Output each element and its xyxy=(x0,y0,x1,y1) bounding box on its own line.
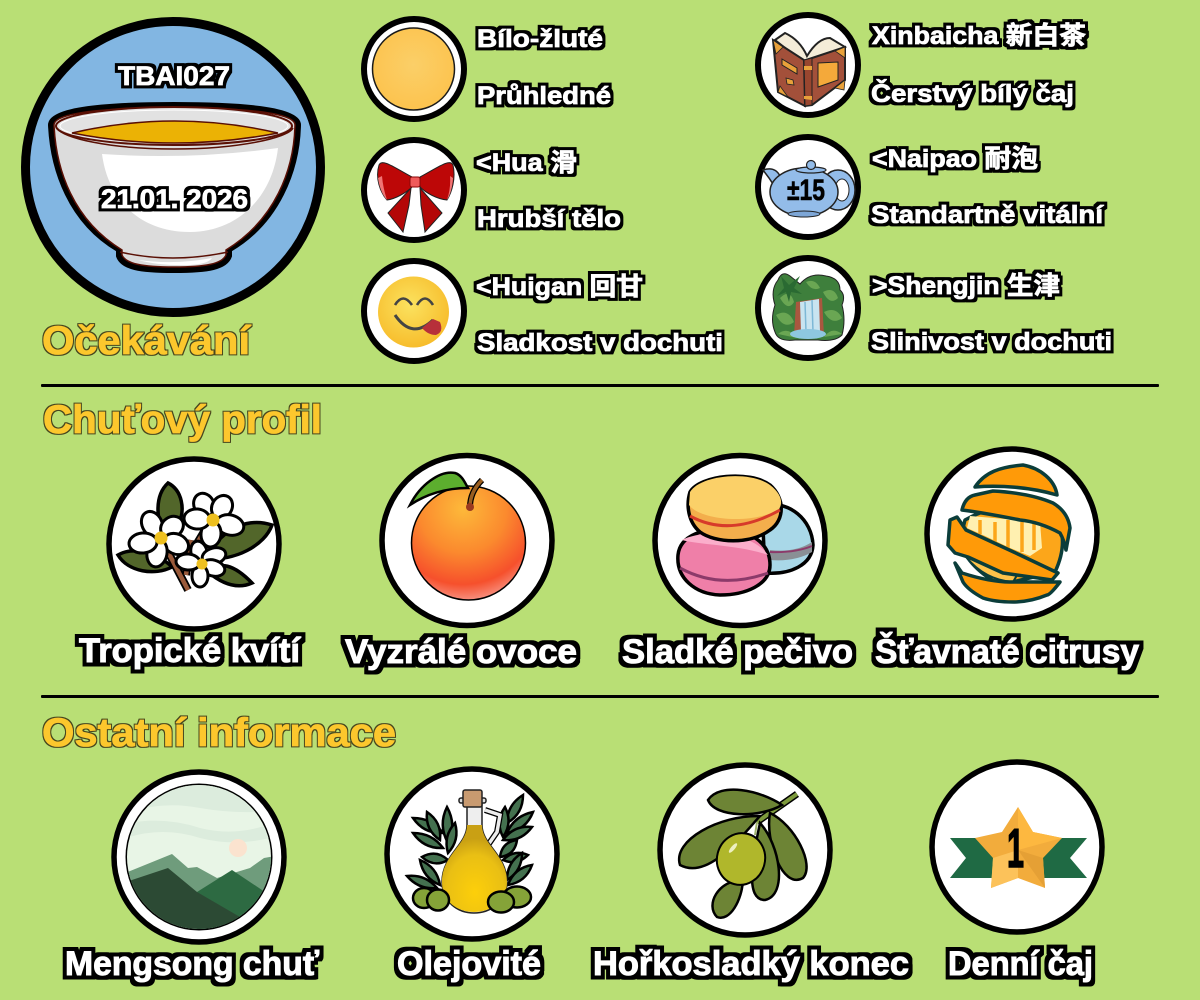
panel: flavour profile xyxy=(79,449,1139,671)
icon: macarons xyxy=(655,456,825,626)
divider 2 xyxy=(41,695,1159,698)
divider 1 xyxy=(41,384,1159,387)
icon: peach xyxy=(382,456,552,626)
text: shengjin: >Shengjin 生津 xyxy=(872,272,1060,300)
text: body: Hrubší tělo xyxy=(477,205,621,233)
icon: smiling face xyxy=(364,261,464,361)
icon: olive branch xyxy=(660,765,830,935)
heading: flavour profile: Chuťový profil xyxy=(43,398,322,442)
label: mengsong taste: Mengsong chuť xyxy=(65,945,320,983)
label: juicy citrus: Šťavnaté citrusy xyxy=(875,632,1139,671)
icon: teapot: ±15 xyxy=(787,174,825,207)
icon: mountain landscape xyxy=(114,772,284,942)
panel: other information xyxy=(65,762,1102,983)
text: naipao: <Naipao 耐泡 xyxy=(872,145,1038,173)
badge code: TBAI027 xyxy=(118,61,230,91)
label: bittersweet finish: Hořkosladký konec xyxy=(593,945,909,983)
icon: olive oil xyxy=(387,769,557,939)
text: saliva aftertaste: Slinivost v dochuti xyxy=(871,328,1112,356)
icon: bow xyxy=(364,140,464,240)
text: sweet aftertaste: Sladkost v dochuti xyxy=(477,329,723,357)
text: vitality: Standartně vitální xyxy=(871,201,1104,229)
text: colour: Bílo-žluté xyxy=(477,25,603,53)
text: tea name: Xinbaicha 新白茶 xyxy=(872,22,1086,50)
panel: expectation xyxy=(26,15,1112,363)
label: oily: Olejovité xyxy=(397,945,541,983)
text: clarity: Průhledné xyxy=(477,82,611,110)
label: daily tea: Denní čaj xyxy=(948,945,1093,983)
icon: book xyxy=(758,15,858,115)
icon: star rating xyxy=(932,762,1102,932)
label: sweet pastry: Sladké pečivo xyxy=(622,633,853,671)
badge date: 21.01. 2026 xyxy=(101,184,248,214)
icon: teapot xyxy=(758,137,858,237)
icon: tea bowl badge xyxy=(26,22,320,312)
icon: star rating: 1 xyxy=(1007,817,1024,879)
text: huigan: <Huigan 回甘 xyxy=(476,273,643,301)
heading: expectation: Očekávání xyxy=(42,319,252,363)
heading: other information: Ostatní informace xyxy=(42,711,396,755)
icon: liquor colour xyxy=(364,19,464,119)
icon: waterfall xyxy=(758,258,858,358)
icon: tropical flowers xyxy=(109,459,279,629)
text: smoothness: <Hua 滑 xyxy=(476,149,577,177)
text: tea type: Čerstvý bílý čaj xyxy=(871,78,1074,108)
label: ripe fruit: Vyzrálé ovoce xyxy=(345,633,577,671)
label: tropical flowers: Tropické kvítí xyxy=(79,632,302,670)
icon: peeled citrus xyxy=(927,449,1097,619)
